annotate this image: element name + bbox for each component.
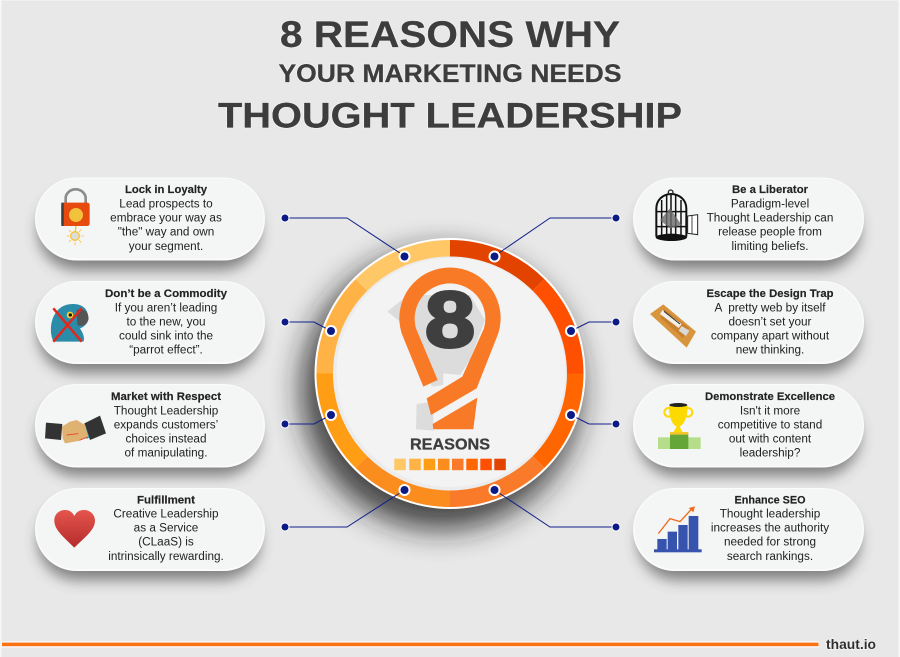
text: Fulfillment — [108, 494, 224, 563]
text: Be a Liberator: Be a Liberator — [732, 184, 809, 196]
text: Lock in Loyalty: your segment. — [129, 240, 203, 253]
text: Market with Respect: Thought Leadership — [114, 404, 219, 417]
text: Enhance SEO: search rankings. — [727, 550, 813, 563]
title — [218, 13, 682, 136]
text: Demonstrate Excellence: leadership? — [740, 447, 801, 460]
panel: Fulfillment — [35, 488, 265, 571]
text: Escape the Design Trap — [706, 288, 834, 356]
text: Escape the Design Trap: Escape the Design Trap — [706, 288, 834, 300]
title: 8 REASONS WHY — [280, 13, 620, 55]
text: Lock in Loyalty: embrace your way as — [110, 212, 222, 225]
text: Escape the Design Trap: new thinking. — [736, 344, 804, 356]
footer rule — [2, 641, 819, 648]
text: Fulfillment: Creative Leadership — [113, 508, 219, 521]
connectors: leader lines and dots — [280, 214, 620, 532]
text: Be a Liberator: Thought Leadership can — [707, 212, 833, 225]
text: Be a Liberator: limiting beliefs. — [731, 240, 809, 253]
panel: Demonstrate Excellence — [633, 384, 864, 468]
panel: Be a Liberator — [633, 178, 864, 260]
icon: rising bar chart — [654, 506, 702, 552]
text: Demonstrate Excellence: Isn't it more — [740, 404, 801, 417]
text: Fulfillment: Fulfillment — [137, 494, 195, 506]
footer: thaut.io: thaut.io — [826, 636, 876, 652]
text: Demonstrate Excellence: out with content — [729, 432, 812, 445]
panel: Escape the Design Trap — [633, 281, 864, 364]
text: Don't be a Commodity: “parrot effect”. — [129, 344, 203, 356]
legend: colour squares — [394, 459, 506, 470]
icon: handshake — [45, 416, 106, 443]
numeral 8: 8 — [425, 274, 475, 364]
text: Fulfillment: as a Service — [134, 522, 199, 535]
text: Market with Respect — [111, 391, 221, 460]
icon: lightbulb with number 8 — [387, 267, 501, 431]
text: Demonstrate Excellence: Demonstrate Excellence — [705, 391, 835, 403]
panel: Lock in Loyalty — [35, 178, 265, 260]
icon: trophy on podium — [658, 403, 701, 449]
text: Demonstrate Excellence: competitive to stand — [718, 418, 822, 431]
text: Don't be a Commodity: to the new, you — [126, 316, 206, 328]
text: Market with Respect: of manipulating. — [125, 447, 207, 460]
text: Enhance SEO: Enhance SEO — [734, 494, 806, 506]
panel: Don't be a Commodity — [35, 281, 265, 364]
text: Lock in Loyalty: "the" way and own — [118, 226, 214, 239]
text: Lock in Loyalty: Lead prospects to — [119, 198, 213, 210]
text: Don't be a Commodity: If you aren’t leading — [115, 302, 217, 315]
text: Be a Liberator: Paradigm-level — [731, 198, 809, 210]
text: Escape the Design Trap: company apart without — [711, 330, 830, 342]
text: Escape the Design Trap: A pretty web by itself — [714, 302, 826, 315]
bulb outline — [399, 267, 501, 429]
text: Fulfillment: intrinsically rewarding. — [108, 550, 224, 563]
text: Enhance SEO: Thought leadership — [720, 508, 821, 521]
text: Enhance SEO — [711, 494, 829, 563]
text: Don't be a Commodity: could sink into the — [119, 330, 213, 342]
panel: pill shadows — [38, 192, 860, 580]
text: Lock in Loyalty: Lock in Loyalty — [125, 184, 208, 196]
text: Be a Liberator — [707, 184, 833, 253]
panel: Market with Respect — [35, 384, 265, 468]
text: Fulfillment: (CLaaS) is — [138, 536, 194, 549]
panel: central wheel shadow — [301, 250, 581, 530]
icon: open birdcage — [656, 190, 698, 241]
panel: Enhance SEO — [633, 488, 864, 571]
icon: padlock — [61, 189, 90, 245]
text: Demonstrate Excellence — [705, 391, 835, 460]
title: YOUR MARKETING NEEDS — [278, 60, 622, 88]
text: Don't be a Commodity — [105, 288, 228, 356]
text: Market with Respect: choices instead — [126, 432, 206, 445]
text: Don't be a Commodity: Don’t be a Commodity — [105, 288, 228, 300]
heading: REASONS: REASONS — [410, 436, 490, 454]
bulb shadow — [387, 295, 485, 431]
text: Enhance SEO: needed for strong — [724, 536, 816, 549]
icon: heart — [54, 510, 95, 548]
title: THOUGHT LEADERSHIP — [218, 96, 682, 136]
text: Be a Liberator: release people from — [718, 226, 822, 239]
donut chart: eight reasons ring — [314, 238, 586, 509]
icon: crossed-out parrot — [51, 304, 88, 342]
text: Escape the Design Trap: doesn’t set your — [729, 316, 812, 328]
text: Enhance SEO: increases the authority — [711, 522, 829, 535]
text: Market with Respect: Market with Respect — [111, 391, 221, 403]
text: Market with Respect: expands customers’ — [114, 418, 218, 431]
icon: web page on mat — [650, 304, 696, 348]
text: Lock in Loyalty — [110, 184, 222, 253]
